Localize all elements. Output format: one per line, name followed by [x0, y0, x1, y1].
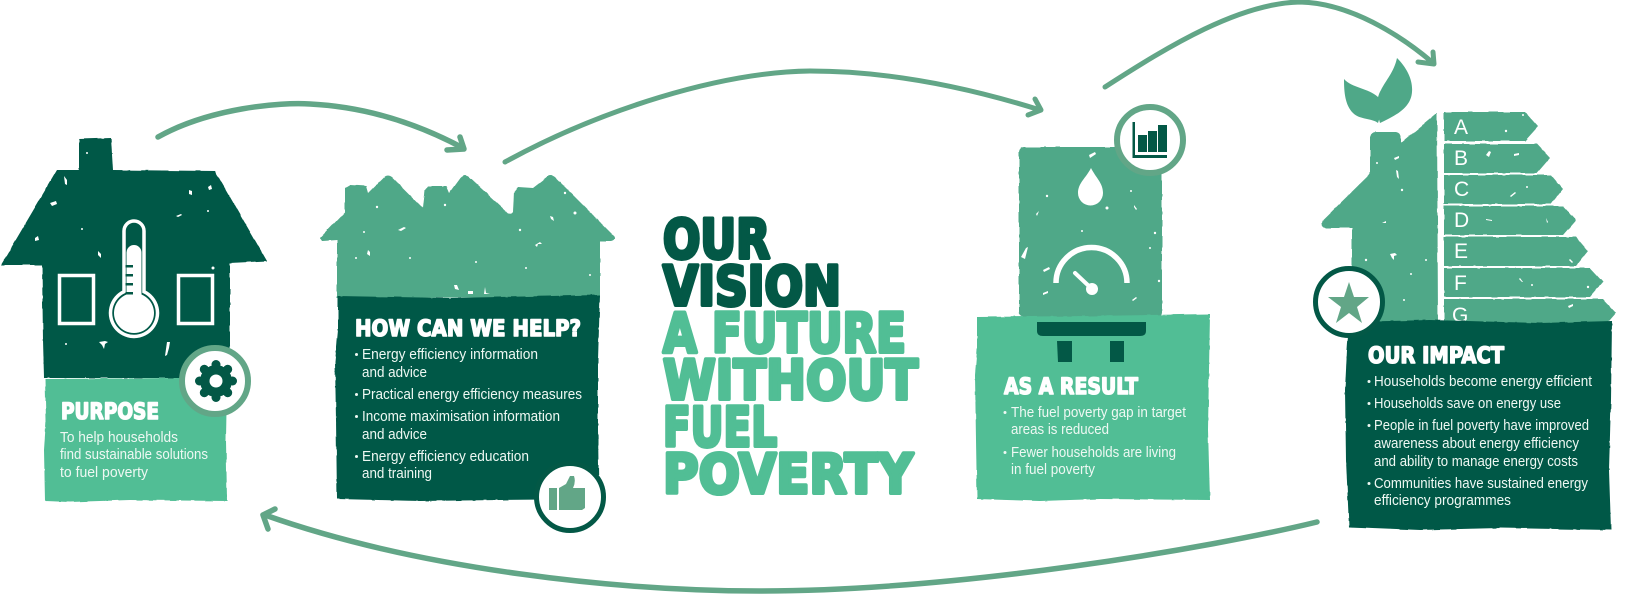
panel: purpose	[1, 138, 267, 502]
icon: bar chart badge	[1117, 107, 1183, 173]
heading: how can we help: HOW CAN WE HELP?	[355, 317, 581, 342]
icon: thermometer	[110, 221, 158, 336]
panel: how can we help	[320, 176, 615, 530]
energy rating chart: F	[1454, 272, 1467, 295]
panel: vision headline	[663, 208, 918, 506]
panel: our impact	[1316, 58, 1616, 530]
icon: leaves	[1344, 58, 1412, 123]
energy rating chart: A	[1454, 116, 1468, 139]
heading: a future without fuel poverty: FUEL	[663, 396, 777, 459]
help list: Income maximisation information	[362, 409, 560, 425]
result list	[1004, 405, 1186, 478]
energy rating chart: B	[1454, 147, 1468, 170]
heading: a future without fuel poverty: POVERTY	[663, 443, 914, 506]
icon: dark house with thermometer	[1, 138, 267, 378]
result list: Fewer households are living	[1011, 445, 1176, 461]
help list: Energy efficiency information	[362, 347, 538, 363]
heading: purpose: PURPOSE	[61, 400, 159, 425]
icon: row of houses	[320, 176, 615, 298]
heading: our vision	[663, 208, 841, 318]
result text box	[975, 314, 1210, 501]
purpose description: to fuel poverty	[60, 465, 149, 481]
icon: left window	[60, 276, 94, 324]
result list: areas is reduced	[1011, 422, 1109, 438]
help list: Energy efficiency education	[362, 449, 529, 465]
help text box	[335, 295, 600, 501]
heading: as a result: AS A RESULT	[1004, 375, 1138, 400]
icon: half house	[1322, 113, 1438, 325]
icon: gauge	[1056, 248, 1127, 295]
arrow: our impact back to purpose	[263, 509, 1317, 591]
help list: and training	[362, 466, 432, 482]
impact list: Communities have sustained energy	[1374, 476, 1589, 492]
icon: boiler base and feet	[1037, 322, 1146, 362]
impact text box	[1345, 320, 1612, 530]
arrow: as a result to our impact	[1105, 2, 1434, 87]
icon: water drop	[1078, 168, 1103, 205]
impact list: People in fuel poverty have improved	[1374, 418, 1589, 434]
help list	[355, 347, 582, 482]
purpose text box	[44, 378, 227, 502]
icon: boiler	[1019, 147, 1162, 317]
icon: thumbs up badge	[536, 464, 604, 530]
icon: gear badge	[182, 348, 248, 414]
purpose description: find sustainable solutions	[60, 447, 208, 463]
arrow: purpose to how can we help	[158, 104, 464, 150]
icon: star badge	[1316, 268, 1382, 336]
panel: as a result	[975, 107, 1210, 501]
heading: a future without fuel poverty: A FUTURE	[663, 302, 906, 365]
impact list: awareness about energy efficiency	[1374, 436, 1580, 452]
energy rating chart	[1444, 112, 1616, 328]
heading: our vision: OUR	[663, 208, 770, 271]
heading: a future without fuel poverty: WITHOUT	[663, 349, 918, 412]
impact list: and ability to manage energy costs	[1374, 454, 1578, 470]
help list: and advice	[362, 427, 427, 443]
impact list: Households save on energy use	[1374, 396, 1561, 412]
help list: and advice	[362, 365, 427, 381]
energy rating chart: E	[1454, 240, 1468, 263]
purpose description: To help households	[60, 430, 178, 446]
impact list	[1368, 374, 1592, 509]
purpose description	[60, 430, 208, 481]
icon: right window	[178, 276, 212, 324]
heading: our vision: VISION	[663, 255, 841, 318]
heading: a future without fuel poverty	[663, 302, 918, 506]
result list: in fuel poverty	[1011, 462, 1096, 478]
impact list: efficiency programmes	[1374, 493, 1511, 509]
impact list: Households become energy efficient	[1374, 374, 1592, 390]
arrow: how can we help to as a result	[505, 71, 1041, 162]
help list: Practical energy efficiency measures	[362, 387, 582, 403]
energy rating chart: G	[1452, 304, 1468, 327]
energy rating chart: C	[1454, 178, 1469, 201]
energy rating chart: D	[1454, 209, 1469, 232]
result list: The fuel poverty gap in target	[1011, 405, 1186, 421]
heading: our impact: OUR IMPACT	[1368, 344, 1504, 369]
